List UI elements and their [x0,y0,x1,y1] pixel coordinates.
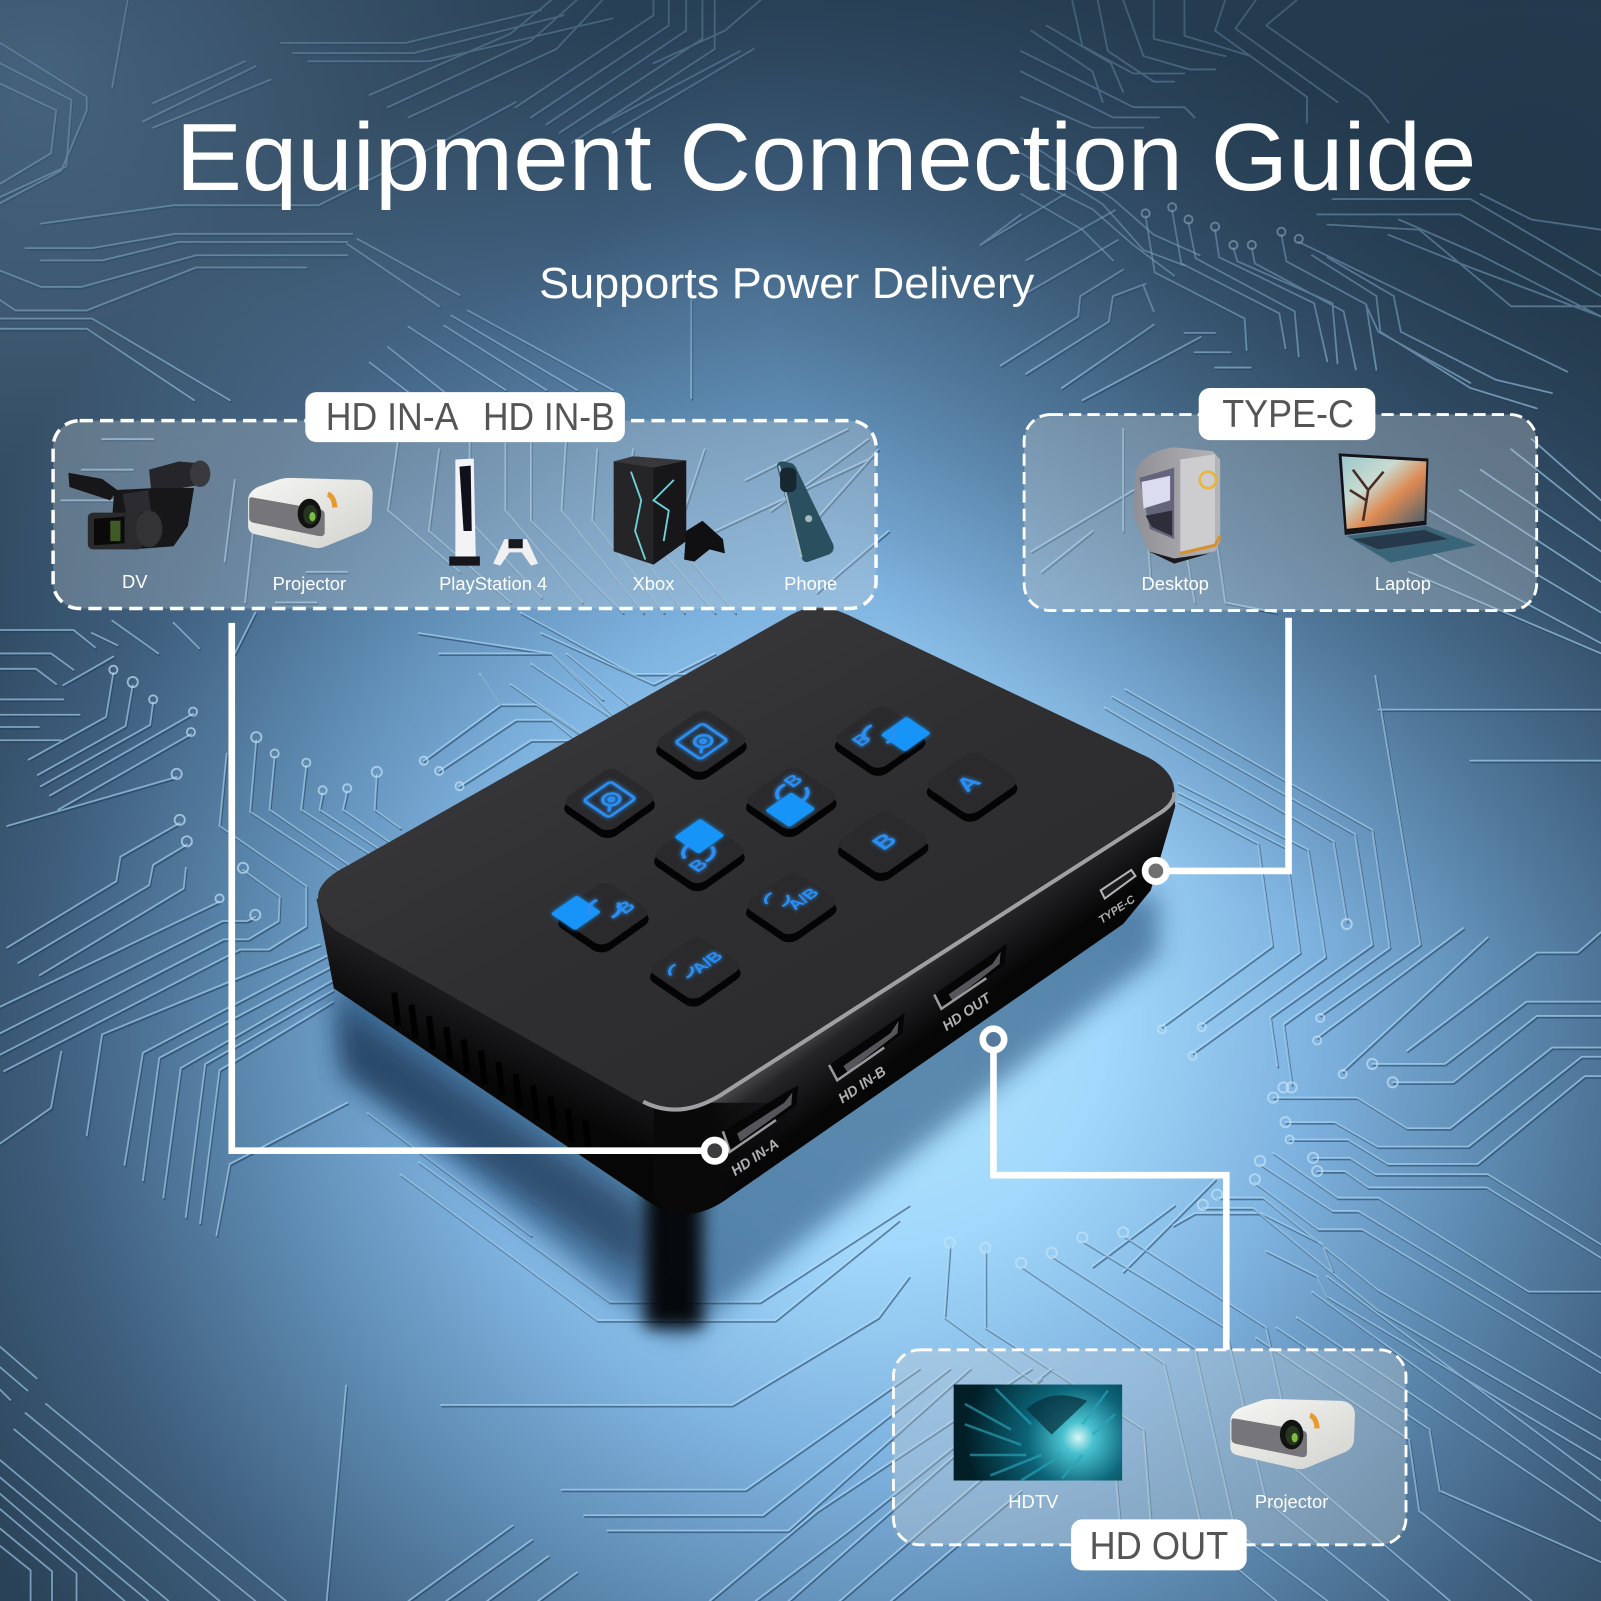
product: HDMI switch device [317,608,1175,1214]
connector: HD IN to port [232,623,725,1161]
label: HDTV: HDTV [1008,1491,1059,1512]
top face [318,608,1174,1110]
label: HD IN-A HD IN-B: HD IN-B [483,396,615,439]
icon: desktop PC [1133,447,1220,564]
label: Phone: Phone [784,573,837,594]
left side with vents [317,899,685,1214]
label: PlayStation 4: PlayStation 4 [439,573,547,594]
label: HD IN-A HD IN-B [305,392,625,442]
button icons: B [867,829,903,854]
button icons: A [951,771,987,796]
label: Projector: Projector [1255,1491,1328,1512]
icon: laptop [1339,453,1476,563]
port labels: HD OUT [940,990,995,1035]
icon: HDTV [954,1385,1122,1481]
subtitle: Supports Power Delivery [539,259,1034,308]
label: HD OUT: HD OUT [1089,1525,1228,1568]
panel: TYPE-C inputs [1024,388,1537,611]
port labels: TYPE-C [1097,893,1138,927]
title: Equipment Connection Guide [176,104,1476,211]
icon: DV camera [68,460,210,549]
connector: TYPE-C to port [1145,618,1289,882]
button icons: B [685,856,713,876]
front side with ports [653,780,1175,1214]
label: TYPE-C [1199,388,1375,440]
icon: projector [1230,1399,1355,1469]
port labels: HD IN-A [728,1136,782,1180]
button icons: A/B [783,885,823,913]
icon: projector [248,478,373,548]
buttons [553,703,1022,1010]
icon: PlayStation console [449,458,538,566]
button icons: B [612,898,641,918]
port labels [728,893,1138,1180]
panel: HD output [893,1350,1406,1570]
button icons: A/B [687,948,727,976]
button icons: B [848,730,876,750]
port labels: HD IN-B [836,1064,889,1107]
icon: Xbox console [614,456,725,565]
label: DV: DV [122,571,148,592]
device shadow and reflection [332,893,1159,1340]
HDMI ports [723,870,1135,1152]
label: Projector: Projector [273,573,346,594]
label: Desktop: Desktop [1142,573,1209,594]
label: TYPE-C: TYPE-C [1222,393,1354,436]
button icons [551,717,987,982]
label: Laptop: Laptop [1375,573,1431,594]
icon: phone [777,461,834,562]
label: HD IN-A HD IN-B: HD IN-A [326,396,459,439]
button icons: B [780,771,808,791]
label: Xbox: Xbox [633,573,674,594]
connector: HD OUT to port [983,1029,1226,1350]
panel: HD inputs [53,392,876,609]
